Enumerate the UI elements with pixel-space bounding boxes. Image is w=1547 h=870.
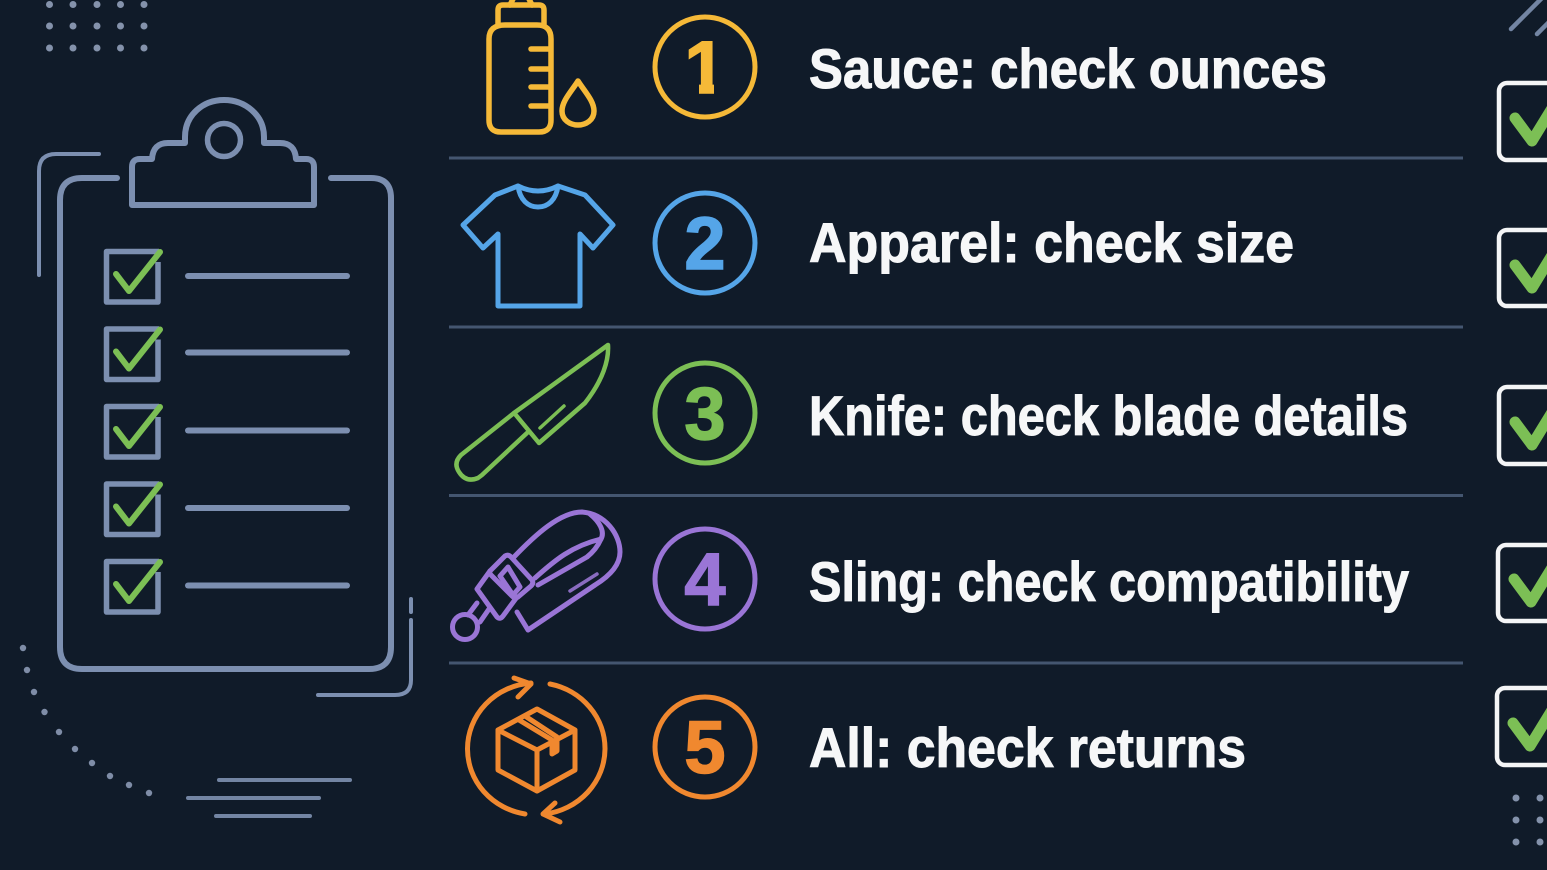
checklist row 2 [106,329,347,380]
number badge 2 [655,193,755,293]
label: knife: Knife: check blade details [809,384,1408,447]
icon: box with return arrows [467,678,605,822]
number badge 5: 5 [684,706,726,789]
number badge 4: 4 [684,538,726,621]
icon: clipboard checklist [39,100,411,695]
number badge 1: 1 [684,26,726,109]
label: apparel: Apparel: check size [809,211,1294,274]
label: all: All: check returns [809,716,1246,779]
checklist row 1 [106,252,347,302]
clipboard clip hole [208,124,240,156]
number badge 3: 3 [684,372,726,455]
number badge 2: 2 [684,202,726,285]
decoration: lines under clipboard [188,780,350,816]
status check 3 [1499,387,1547,464]
icon: knife [456,345,608,480]
clipboard back sheet corners [39,154,411,695]
number badge 3 [655,363,755,463]
row 1: sauce [489,0,1547,160]
row dividers [449,158,1463,663]
status check 2 [1499,230,1547,306]
decoration: top left dot grid [46,1,148,52]
decoration: top right slashes [1511,0,1547,34]
status check 4 [1498,545,1547,621]
number badge 1 [655,17,755,117]
number badge 5 [655,697,755,797]
row 4: sling [452,512,1547,640]
icon: sauce bottle with drop [489,0,594,132]
label: sling: Sling: check compatibility [809,550,1409,613]
label: sauce: Sauce: check ounces [809,37,1327,100]
row 3: knife [456,345,1547,480]
number badge 4 [655,529,755,629]
clipboard board outline [60,178,391,669]
status check 1 [1499,83,1547,160]
decoration: curved dotted arc [20,645,152,796]
icon: t-shirt [463,186,613,306]
checklist row 3 [106,406,347,457]
checklist row 5 [106,562,347,612]
status check 5 [1497,688,1547,765]
checklist row 4 [106,484,347,534]
icon: sling strap [452,512,620,640]
row 5: returns [467,678,1547,822]
row 2: apparel [463,186,1547,306]
clipboard clip [132,100,314,205]
decoration: bottom right dot grid [1512,794,1544,846]
